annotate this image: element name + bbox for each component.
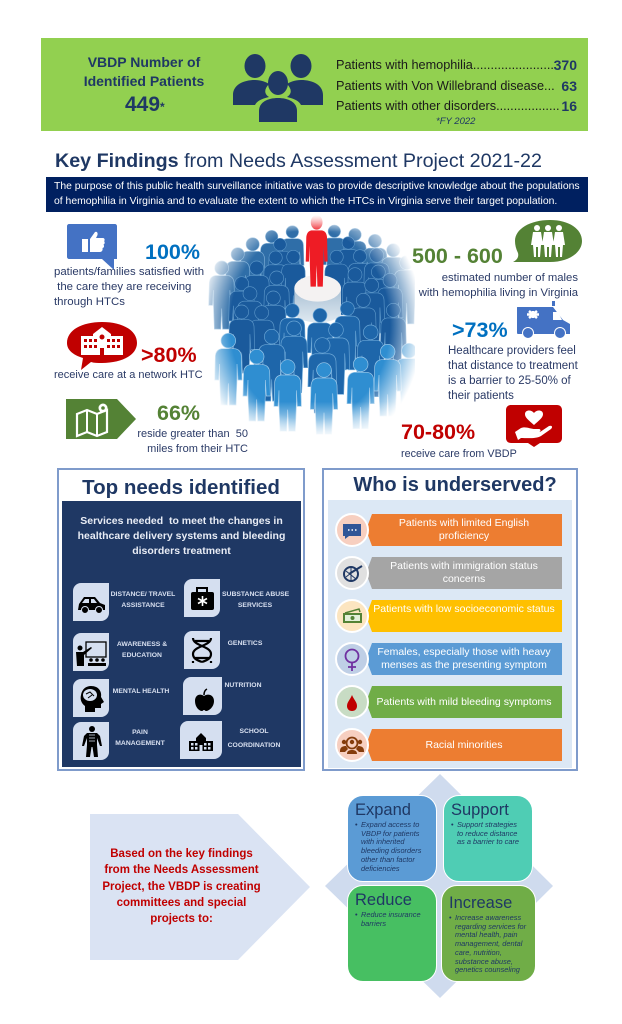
patient breakdown list: 63 bbox=[561, 78, 577, 94]
panel: top needs identified bbox=[57, 468, 305, 771]
text: distance from HTC: miles from their HTC bbox=[147, 443, 248, 455]
label: AWARENESS & bbox=[117, 641, 167, 648]
need: nutrition bbox=[183, 677, 262, 715]
stat: 100%: 100% bbox=[145, 240, 200, 264]
panel: who is underserved bbox=[322, 468, 578, 771]
banner heading: Identified Patients bbox=[84, 73, 204, 89]
intro text band bbox=[46, 177, 588, 212]
banner heading: VBDP Number of bbox=[88, 54, 200, 70]
need: substance abuse services bbox=[184, 579, 289, 617]
intro text bbox=[78, 515, 285, 557]
text: healthcare providers distance barrier: that distance to treatment bbox=[448, 360, 578, 372]
banner heading bbox=[84, 54, 204, 89]
icon: network HTC hospital bubble bbox=[67, 322, 137, 370]
row: mild bleeding: Patients with mild bleeding symptoms bbox=[376, 696, 552, 708]
row: racial minorities: Racial minorities bbox=[425, 738, 503, 750]
box: reduce: Reduce insurance barriers bbox=[361, 910, 421, 928]
diagram: four action boxes on a diamond bbox=[325, 774, 553, 998]
box: support: Support bbox=[451, 801, 509, 819]
label: MANAGEMENT bbox=[115, 740, 165, 746]
need: genetics bbox=[184, 631, 262, 669]
icon: female symbol bbox=[335, 642, 369, 676]
box: support bbox=[443, 795, 533, 882]
label: COORDINATION bbox=[228, 742, 280, 749]
intro text: healthcare delivery systems and bleeding bbox=[78, 530, 285, 542]
box: increase bbox=[441, 885, 536, 982]
row: immigration status: concerns bbox=[443, 573, 485, 585]
row: females bbox=[366, 643, 562, 675]
label bbox=[222, 591, 289, 608]
row: limited English: Patients with limited English bbox=[399, 517, 529, 529]
label bbox=[111, 591, 176, 608]
icon: people with magnifier bbox=[335, 728, 369, 762]
row: immigration status bbox=[366, 557, 562, 589]
text: distance from HTC: reside greater than 50 bbox=[137, 428, 248, 440]
label: EDUCATION bbox=[122, 652, 162, 658]
label bbox=[228, 728, 280, 749]
label: GENETICS bbox=[228, 640, 262, 647]
icon: skeleton body bbox=[73, 722, 109, 760]
icon: DNA helix bbox=[184, 631, 220, 669]
row: mild bleeding bbox=[366, 686, 562, 718]
box: increase: Increase bbox=[449, 894, 512, 912]
label: NUTRITION bbox=[224, 682, 262, 689]
box: expand bbox=[347, 795, 437, 882]
row: low socioeconomic status: Patients with low socioeconomic status bbox=[373, 603, 555, 615]
red figure bbox=[306, 215, 328, 287]
stat: 500 - 600: 500 - 600 bbox=[412, 244, 503, 268]
text: satisfied with care: the care they are receiving bbox=[57, 281, 191, 293]
arrow text: committees and special bbox=[117, 897, 246, 909]
arrow text: Based on the key findings bbox=[110, 848, 253, 860]
icon: car bbox=[73, 583, 109, 621]
row: immigration status: Patients with immigration status bbox=[390, 560, 538, 572]
back ring of figures bbox=[209, 225, 420, 329]
navy content area bbox=[62, 501, 301, 767]
intro text: Services needed to meet the changes in bbox=[80, 515, 283, 527]
intro text band: The purpose of this public health surveillance initiative was to provide descriptive knowledge about the populations bbox=[54, 181, 580, 192]
intro text band: of hemophilia in Virginia and to evaluate the extent to which the HTCs in Virginia serve their target population. bbox=[54, 196, 557, 206]
middle ring of figures bbox=[258, 302, 384, 413]
text: care from VBDP: receive care from VBDP bbox=[401, 448, 517, 460]
need: distance / travel assistance bbox=[73, 583, 176, 621]
icon: heart in hand bbox=[506, 405, 562, 447]
icon: map pentagon bbox=[66, 399, 136, 439]
heading: who is underserved: Who is underserved? bbox=[353, 474, 557, 496]
label: DISTANCE/ TRAVEL bbox=[111, 591, 175, 598]
text: healthcare providers distance barrier: Healthcare providers feel bbox=[448, 345, 576, 357]
icon: money bbox=[335, 599, 369, 633]
arrow text bbox=[103, 848, 260, 924]
row: low socioeconomic status bbox=[366, 600, 562, 632]
icon: blood drop bbox=[335, 685, 369, 719]
text: estimated males bbox=[418, 272, 578, 299]
patient breakdown list bbox=[336, 57, 577, 114]
total patient count: 449* bbox=[125, 93, 165, 116]
need: awareness and education bbox=[73, 633, 167, 671]
row: limited English: proficiency bbox=[439, 530, 489, 542]
icon: teacher bbox=[73, 633, 109, 671]
icon: head with brain bbox=[73, 679, 109, 717]
arrow text: from the Needs Assessment bbox=[104, 864, 259, 876]
icon: speech bubble bbox=[335, 513, 369, 547]
label: MENTAL HEALTH bbox=[113, 688, 169, 695]
patient breakdown list: 16 bbox=[561, 98, 577, 114]
label bbox=[117, 641, 167, 658]
label: SCHOOL bbox=[239, 728, 269, 735]
text: satisfied with care: through HTCs bbox=[54, 296, 125, 308]
illustration: crowd around red figure on a pedestal bbox=[208, 216, 415, 434]
text: distance from HTC bbox=[137, 428, 248, 455]
label: SUBSTANCE ABUSE bbox=[222, 591, 289, 598]
text: network HTC: receive care at a network HTC bbox=[54, 369, 203, 381]
text: estimated males: estimated number of males bbox=[442, 272, 578, 284]
patient breakdown list: 370 bbox=[554, 57, 577, 73]
stat: 70-80%: 70-80% bbox=[401, 420, 475, 444]
patient breakdown list: Patients with Von Willebrand disease... bbox=[336, 78, 555, 92]
underserved list background bbox=[328, 500, 572, 768]
arrow: based on key findings bbox=[90, 814, 310, 960]
box: reduce bbox=[347, 885, 437, 982]
icon: ambulance bbox=[517, 301, 570, 338]
need: mental health bbox=[73, 679, 169, 717]
icon: three people bubble bbox=[513, 220, 582, 262]
stat: 66%: 66% bbox=[157, 401, 200, 425]
icon: medical case bbox=[184, 579, 220, 617]
label: PAIN bbox=[132, 729, 148, 736]
icon: school building bbox=[180, 721, 222, 759]
icon: apple bbox=[183, 677, 222, 715]
text: healthcare providers distance barrier: their patients bbox=[448, 390, 514, 402]
text: healthcare providers distance barrier bbox=[448, 345, 578, 402]
fades bbox=[205, 215, 415, 465]
label: ASSISTANCE bbox=[121, 602, 165, 608]
row: limited English bbox=[366, 514, 562, 546]
icon: globe with plane bbox=[335, 556, 369, 590]
icon: thumbs up speech bubble bbox=[67, 224, 117, 270]
text: satisfied with care bbox=[54, 266, 204, 308]
text: satisfied with care: patients/families satisfied with bbox=[54, 266, 204, 278]
row: females: Females, especially those with heavy bbox=[377, 646, 551, 658]
arrow text: Project, the VBDP is creating bbox=[102, 881, 261, 893]
intro text: disorders treatment bbox=[132, 545, 231, 557]
pedestal bbox=[294, 275, 341, 322]
row: females: menses as the presenting symptom bbox=[381, 659, 547, 671]
patient breakdown list: Patients with hemophilia.............................. bbox=[336, 58, 577, 72]
label: SERVICES bbox=[238, 602, 272, 608]
box: expand: Expand bbox=[355, 801, 411, 819]
row: racial minorities bbox=[366, 729, 562, 761]
diamond background bbox=[325, 774, 553, 998]
front ring of figures bbox=[215, 333, 423, 434]
title: Key Findings from Needs Assessment Project 2021-22 bbox=[55, 150, 542, 172]
inner ring of figures bbox=[229, 237, 406, 374]
heading: Top needs identified bbox=[82, 476, 280, 499]
arrow text: projects to: bbox=[150, 913, 213, 925]
text: healthcare providers distance barrier: is a barrier to 25-50% of bbox=[448, 375, 571, 387]
box: increase: Increase awareness regarding services for mental health, pain management, dental care, nutrition, substance abuse, genetics counseling bbox=[455, 913, 526, 974]
fiscal year note: *FY 2022 bbox=[436, 116, 475, 127]
text: estimated males: with hemophilia living in Virginia bbox=[419, 287, 578, 299]
stat: >73%: >73% bbox=[452, 318, 508, 342]
box: support: Support strategies to reduce distance as a barrier to care bbox=[457, 820, 519, 846]
box: reduce: Reduce bbox=[355, 891, 412, 909]
need: pain management bbox=[73, 722, 165, 760]
banner: identified patients bbox=[41, 38, 588, 131]
stat: >80%: >80% bbox=[141, 343, 197, 367]
icon: group of people bbox=[233, 54, 323, 122]
need: school coordination bbox=[180, 721, 280, 759]
label bbox=[115, 729, 165, 746]
box: expand: Expand access to VBDP for patients with inherited bleeding disorders other than factor deficiencies bbox=[361, 820, 421, 873]
